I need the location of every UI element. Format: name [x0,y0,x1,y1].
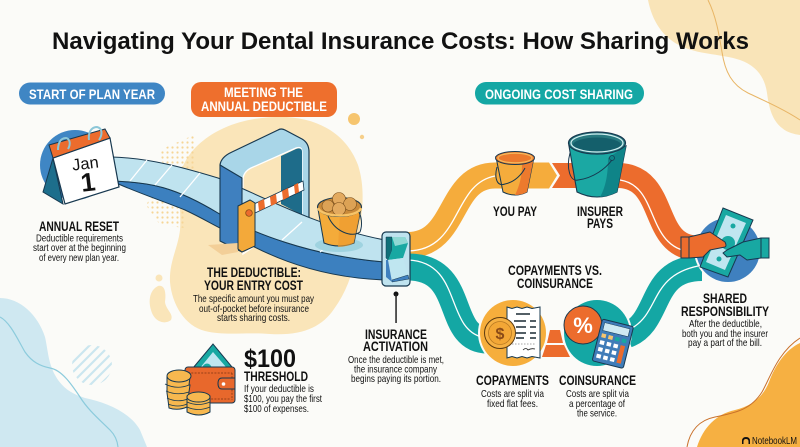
text: the deductible: THE DEDUCTIBLE: [207,265,301,280]
text: $100 threshold: $100 of expenses. [244,403,309,415]
icon: copayment receipt and coin: $ [496,326,505,343]
text: $100 threshold: If your deductible is [244,383,314,395]
background blob: bottom right orange [687,338,800,447]
text: annual reset: of every new plan year. [39,252,119,264]
icon: calendar [40,127,119,204]
gate front post and barrier [208,165,304,255]
text: copayments vs coinsurance heading [508,263,602,291]
text: insurance activation: begins paying its portion. [351,373,441,385]
text: the deductible: The specific amount you must pay [193,293,315,305]
text: shared responsibility [681,291,769,349]
text: coinsurance [559,373,636,420]
flow band: orange-red, insurer pays [552,0,698,252]
icon: insurer pays bucket [568,132,626,197]
text: shared responsibility: both you and the insurer [682,328,768,340]
deductible yellow blob [150,113,364,334]
text: the deductible: starts sharing costs. [217,312,290,324]
pill: meeting the annual deductible: MEETING THE [224,84,303,100]
text: copayments: Costs are split via [481,388,544,400]
icon: coinsurance percent and calculator [562,298,634,368]
text: annual reset [33,219,126,264]
pill: ongoing cost sharing [475,82,644,104]
text: annual reset: start over at the beginning [33,242,126,254]
text: $100 threshold: $100 [244,345,296,373]
text: insurance activation: Once the deductible is met, [348,354,444,366]
icon: copayment receipt and coin [478,298,548,368]
text: insurance activation: INSURANCE [365,327,427,342]
conveyor belt [112,157,385,280]
barrier box [238,200,255,252]
text: insurer pays: PAYS [587,216,613,231]
connector line with dot [394,292,398,323]
pill: start of plan year [19,82,165,104]
flow band: orange-yellow, you pay [408,162,557,251]
text: insurer pays: INSURER [577,204,623,219]
decorative striped circle [72,345,112,385]
text: copayments vs coinsurance heading: COPAYMENTS VS. [508,263,602,278]
text: copayments vs coinsurance heading: COINSURANCE [517,276,593,291]
text: insurance activation: ACTIVATION [363,339,428,354]
text: insurance activation: the insurance company [354,364,438,376]
text: annual reset: ANNUAL RESET [39,219,120,234]
flow band: teal left [408,260,488,340]
icon: handshake with money [681,208,769,284]
background blob: bottom left blue [0,298,147,447]
icon: calendar: Jan [71,153,100,175]
text: insurer pays [577,204,623,231]
text: copayments: COPAYMENTS [476,373,549,388]
text: shared responsibility: SHARED [703,291,747,306]
text: insurance activation [348,327,444,385]
text: the deductible: YOUR ENTRY COST [204,278,304,293]
text: coinsurance: the service. [577,408,617,420]
pill: meeting the annual deductible [191,82,337,117]
icon: activation switch [382,232,410,286]
icon: you pay bucket [496,152,534,195]
text: coinsurance: a percentage of [569,398,625,410]
flow band: teal right [627,266,702,335]
text: annual reset: Deductible requirements [36,232,123,244]
background blob: top right cream [648,0,800,135]
text: shared responsibility: RESPONSIBILITY [681,304,769,319]
text: $100 threshold: THRESHOLD [244,369,308,384]
barrier arm [254,181,304,213]
text: copayments [476,373,549,410]
gate back frame [220,129,309,254]
text: $100 threshold [244,345,322,415]
text: the deductible [193,265,315,324]
icon: bucket with coins on belt [315,192,363,252]
pill: start of plan year: START OF PLAN YEAR [29,86,155,102]
text: you pay: YOU PAY [493,204,537,219]
text: shared responsibility: pay a part of the bill. [688,337,762,349]
text: coinsurance: Costs are split via [566,388,629,400]
halftone dots [146,134,196,228]
text: copayments: fixed flat fees. [487,398,538,410]
icon: balance fulcrum [542,330,570,357]
text: $100 threshold: $100, you pay the first [244,393,322,405]
icon: calendar: 1 [79,166,97,198]
icon: coinsurance percent and calculator: % [573,313,593,338]
text: coinsurance: COINSURANCE [559,373,636,388]
icon: wallet and coins [165,344,235,415]
title: Navigating Your Dental Insurance Costs: How Sharing Works [52,28,749,55]
text: the deductible: out-of-pocket before insurance [199,303,309,315]
text: shared responsibility: After the deductible, [689,318,762,330]
pill: meeting the annual deductible: ANNUAL DEDUCTIBLE [201,98,327,114]
pill: ongoing cost sharing: ONGOING COST SHARING [485,86,633,102]
